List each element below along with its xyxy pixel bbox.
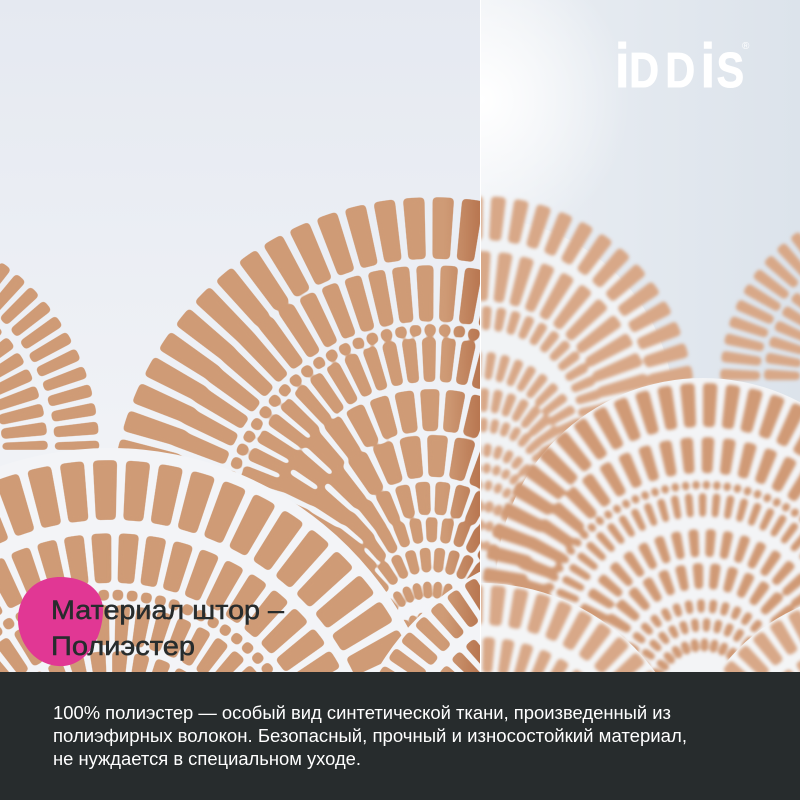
- heading: Материал штор –: [51, 595, 284, 625]
- logo: iDDiS: S: [717, 43, 744, 98]
- panel: sharp curtain fabric: [0, 0, 480, 672]
- logo: iDDiS: i: [615, 32, 629, 101]
- pattern: blurred bottom left fan: [481, 583, 656, 672]
- logo: iDDiS: D: [629, 43, 659, 98]
- text block: description: не нуждается в специальном уходе.: [53, 749, 361, 769]
- pattern: blurred bottom right fan: [722, 606, 800, 672]
- text block: description: 100% полиэстер — особый вид синтетической ткани, произведенный из: [53, 703, 671, 723]
- text block: description: [53, 703, 687, 769]
- panel: blurred curtain fabric: [481, 0, 800, 672]
- pattern: lower left fan: [0, 448, 408, 672]
- logo: iDDiS: D: [665, 43, 695, 98]
- panel: dark footer band: [0, 672, 800, 800]
- pattern: upper main fan: [118, 197, 480, 628]
- pattern: left partial fan: [0, 243, 77, 450]
- pattern: blurred centre fan: [481, 378, 800, 672]
- logo: iDDiS: ®: [742, 41, 750, 52]
- pattern: blurred upper left fan: [481, 194, 695, 566]
- pattern: lower right fan at fold: [380, 572, 480, 672]
- text block: description: полиэфирных волокон. Безопасный, прочный и износостойкий материал,: [53, 726, 687, 746]
- logo: iDDiS: [615, 32, 750, 101]
- heading: Полиэстер: [51, 631, 195, 661]
- logo: iDDiS: i: [701, 32, 715, 101]
- icon: pink blob behind heading: [18, 577, 103, 666]
- pattern: blurred upper right fan: [740, 220, 800, 380]
- heading: [51, 595, 284, 661]
